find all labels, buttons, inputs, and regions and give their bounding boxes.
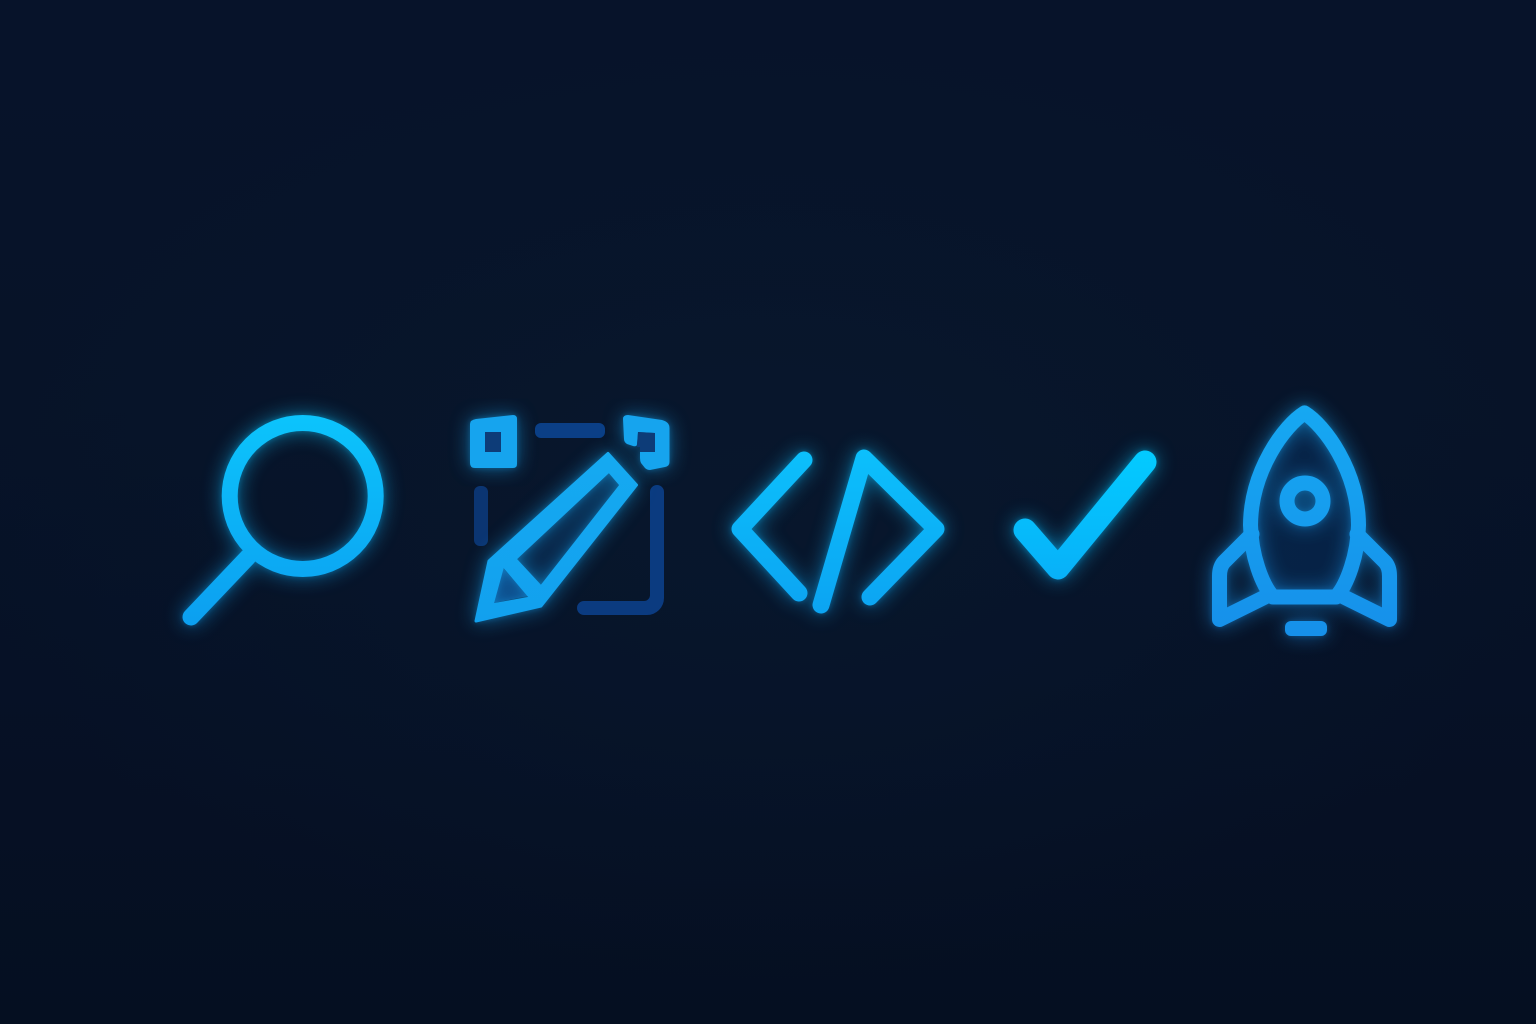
pencil — [494, 568, 528, 603]
icon: code brackets — [740, 458, 936, 605]
rocket interior tint — [1250, 413, 1358, 597]
icon: rocket — [1220, 413, 1390, 636]
frame: dim dashes — [474, 423, 664, 615]
rocket outline — [1220, 413, 1390, 636]
frame: corner handles — [470, 415, 670, 470]
icon: magnifying glass — [191, 423, 376, 617]
icon: pencil on dashed design frame — [470, 415, 670, 621]
icon: check mark — [1025, 462, 1145, 568]
